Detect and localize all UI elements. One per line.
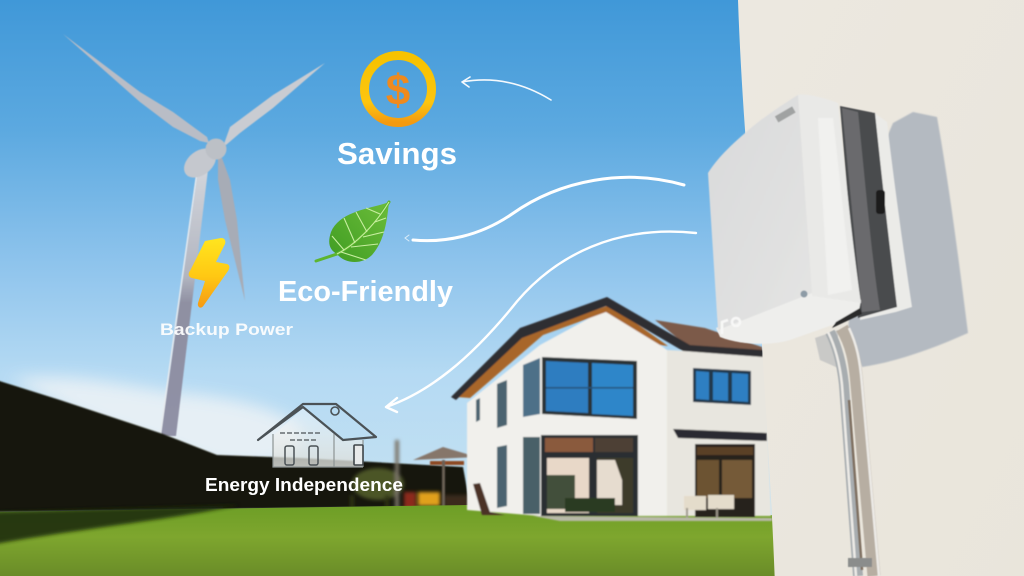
back plate (860, 112, 912, 320)
turbine tower (161, 170, 208, 436)
arrow: battery to eco-friendly (405, 177, 684, 241)
lawn (0, 505, 780, 576)
garden chairs (684, 495, 734, 518)
wall (738, 0, 1024, 576)
benefit: eco-friendly (278, 202, 453, 308)
upper right window (693, 368, 751, 405)
house side and gable wall (467, 308, 667, 516)
clouds (10, 377, 303, 465)
side latch (876, 190, 885, 214)
pipe highlight (828, 328, 879, 576)
turbine blades (63, 34, 325, 301)
house (451, 297, 772, 521)
cover side panel (798, 95, 861, 303)
eco-friendly label: Eco-Friendly (278, 276, 453, 308)
dark roof edge (451, 297, 763, 400)
right pipe (842, 328, 874, 576)
hedge (0, 378, 470, 512)
cover recess (818, 118, 852, 295)
wall shadow (848, 112, 968, 367)
lower glass doors (541, 435, 638, 516)
cover logo mark (722, 318, 740, 334)
conduit pipes (815, 328, 879, 576)
battery unit (708, 95, 912, 344)
benefit: savings (337, 56, 457, 171)
wooden eaves (457, 305, 668, 398)
icon: green leaf (316, 202, 389, 262)
cover bottom edge (716, 290, 861, 344)
lower side window (523, 437, 540, 514)
benefit: energy independence (205, 404, 403, 495)
arrow: battery to savings (462, 77, 551, 100)
awning (673, 429, 767, 441)
icon: dollar coin: $ (386, 66, 410, 115)
patio umbrella (413, 447, 477, 508)
cover underside shadow (832, 308, 862, 328)
pipe rust streak (849, 400, 862, 570)
terrace door (695, 444, 755, 517)
deck chair (473, 483, 505, 515)
wind turbine (63, 34, 325, 436)
small side windows (476, 380, 507, 508)
energy independence label: Energy Independence (205, 475, 403, 495)
benefit: backup power (160, 238, 293, 339)
pipe clamp (848, 558, 872, 567)
tiled roof (655, 320, 763, 356)
turbine hub (206, 138, 226, 160)
sky background (0, 0, 780, 520)
turbine tower highlight (160, 172, 197, 436)
status light (800, 290, 808, 298)
turbine nacelle (178, 142, 222, 184)
arrow: battery to energy independence (386, 232, 696, 412)
terrace (533, 516, 772, 521)
left pipe (830, 332, 858, 576)
lawn shadow (0, 505, 240, 545)
cover ridge label (775, 106, 796, 122)
house right wing wall (667, 350, 771, 516)
garden trees and patio (350, 440, 468, 515)
backup power label: Backup Power (160, 320, 293, 339)
dark side casing (840, 106, 897, 318)
front cover (708, 95, 812, 330)
savings label: Savings (337, 136, 457, 171)
upper side window (523, 358, 540, 417)
upper main window (542, 357, 637, 419)
icon: lightning bolt (189, 238, 229, 308)
icon: house outline (258, 404, 376, 467)
wall mount plate (815, 330, 838, 368)
